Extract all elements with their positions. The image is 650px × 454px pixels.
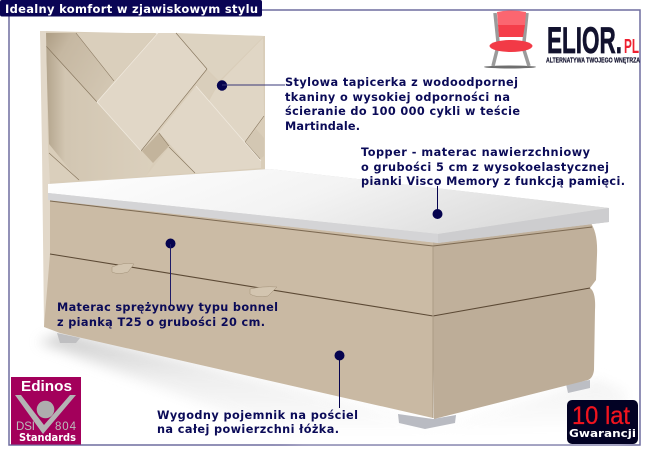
- badge: 10 lat warranty: 10 lat: [572, 402, 630, 430]
- headboard: [40, 31, 265, 327]
- callout: topper: pianki Visco Memory z funkcją pamięci.: [361, 175, 625, 188]
- callout: upholstery: Martindale.: [285, 120, 360, 133]
- front foot: [398, 414, 456, 429]
- right handle: [250, 287, 277, 297]
- bed illustration: [40, 31, 609, 429]
- callout: bonnel mattress: [57, 238, 278, 329]
- left foot: [57, 333, 80, 343]
- left handle: [112, 263, 134, 274]
- badge: Edinos DSI 804 Standards: Edinos: [21, 378, 72, 395]
- logo: Elior.pl: [484, 10, 640, 68]
- callout: upholstery: [217, 76, 520, 133]
- badge: Edinos DSI 804 Standards: Standards: [19, 432, 76, 444]
- callout: storage: [157, 350, 358, 436]
- logo: Elior.pl: PL: [624, 36, 639, 58]
- left edge strip: [40, 31, 50, 327]
- title banner: Idealny komfort w zjawiskowym stylu: [5, 2, 258, 16]
- badge: 10 lat warranty: Gwarancji: [569, 428, 636, 440]
- floor shadow: [38, 332, 625, 440]
- icon: red chair: [484, 10, 536, 68]
- callout: storage: na całej powierzchni łóżka.: [157, 423, 339, 436]
- callout: topper: [361, 146, 625, 219]
- badge: Edinos DSI 804 Standards: DSI: [16, 421, 35, 433]
- topper: [48, 169, 609, 243]
- right foot: [566, 380, 590, 393]
- badge: 10 lat warranty: [567, 400, 638, 444]
- badge: Edinos DSI 804 Standards: [11, 377, 81, 444]
- callout: topper: Topper - materac nawierzchniowy: [361, 146, 591, 159]
- callout: bonnel mattress: Materac sprężynowy typu bonnel: [57, 301, 278, 314]
- badge: Edinos DSI 804 Standards: 804: [55, 421, 77, 433]
- upper box: mattress: [50, 196, 597, 418]
- callout: topper: o grubości 5 cm z wysokoelastycznej: [361, 161, 609, 174]
- callout: upholstery: tkaniny o wysokiej odporności na: [285, 91, 510, 104]
- callout: upholstery: Stylowa tapicerka z wodoodpornej: [285, 76, 518, 89]
- lower box: storage: [44, 254, 595, 419]
- callout: storage: Wygodny pojemnik na pościel: [157, 409, 358, 422]
- callout: bonnel mattress: z pianką T25 o grubości 20 cm.: [57, 316, 265, 329]
- callout: upholstery: ścieranie do 100 000 cykli w teście: [285, 105, 520, 118]
